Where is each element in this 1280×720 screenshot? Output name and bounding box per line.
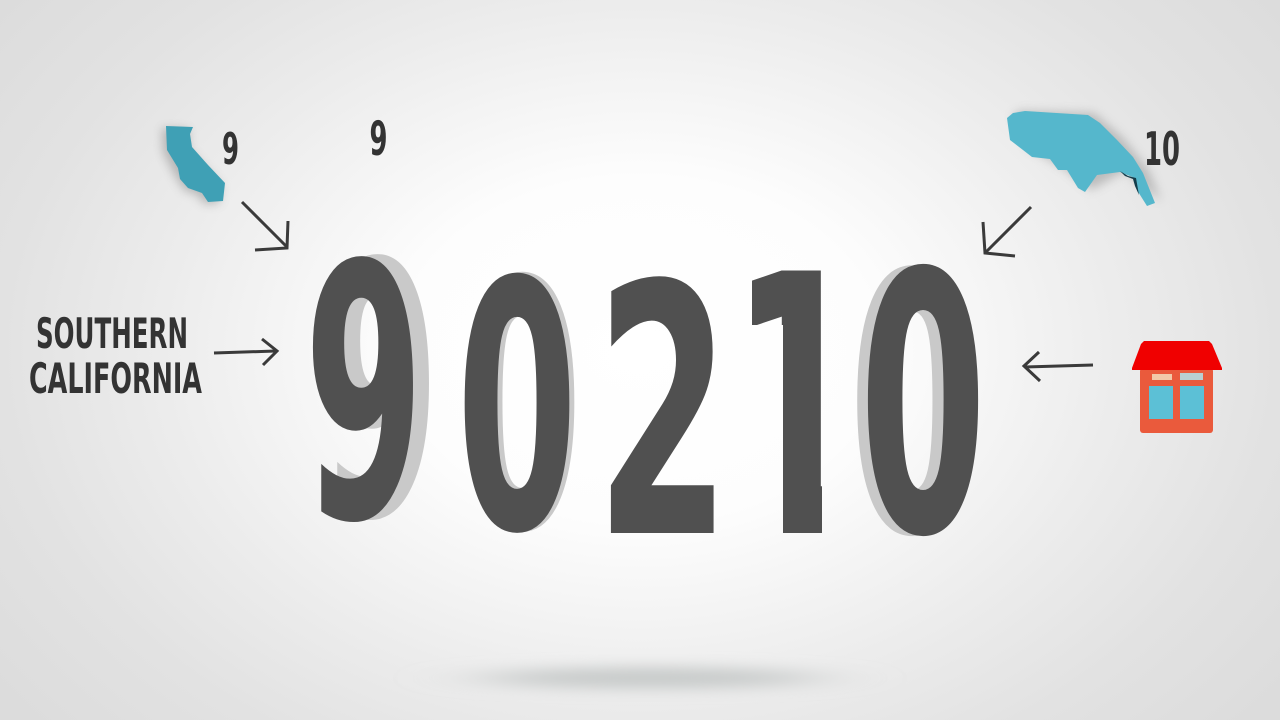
main number 90210 bbox=[312, 254, 978, 536]
digit 9: 9 bbox=[304, 192, 424, 601]
number 10 beside USA: 10 bbox=[1144, 122, 1180, 176]
digit 9: 9 bbox=[320, 190, 440, 599]
arrow: California to 9 bbox=[242, 202, 288, 250]
label: Southern California: SOUTHERN bbox=[36, 309, 188, 358]
digit 0: 0 bbox=[859, 198, 987, 617]
arrow: Southern California to number bbox=[214, 339, 277, 365]
digit 2: 2 bbox=[596, 213, 730, 616]
number 9 beside California: 9 bbox=[222, 124, 239, 175]
label: Southern California: CALIFORNIA bbox=[29, 354, 202, 403]
floor shadow bbox=[480, 667, 820, 689]
digit 0: 0 bbox=[461, 209, 583, 609]
label: Southern California bbox=[29, 309, 202, 403]
icon: California map bbox=[162, 126, 225, 204]
arrow: store to number bbox=[1024, 352, 1093, 381]
icon: store bbox=[1132, 341, 1222, 433]
digit 1: 1 bbox=[720, 200, 872, 619]
icon: United States map bbox=[1007, 111, 1161, 206]
arrow: USA to 10 bbox=[983, 207, 1031, 256]
digit 0: 0 bbox=[456, 210, 578, 610]
number 9 top: 9 bbox=[370, 112, 388, 167]
digit 0: 0 bbox=[848, 200, 976, 617]
